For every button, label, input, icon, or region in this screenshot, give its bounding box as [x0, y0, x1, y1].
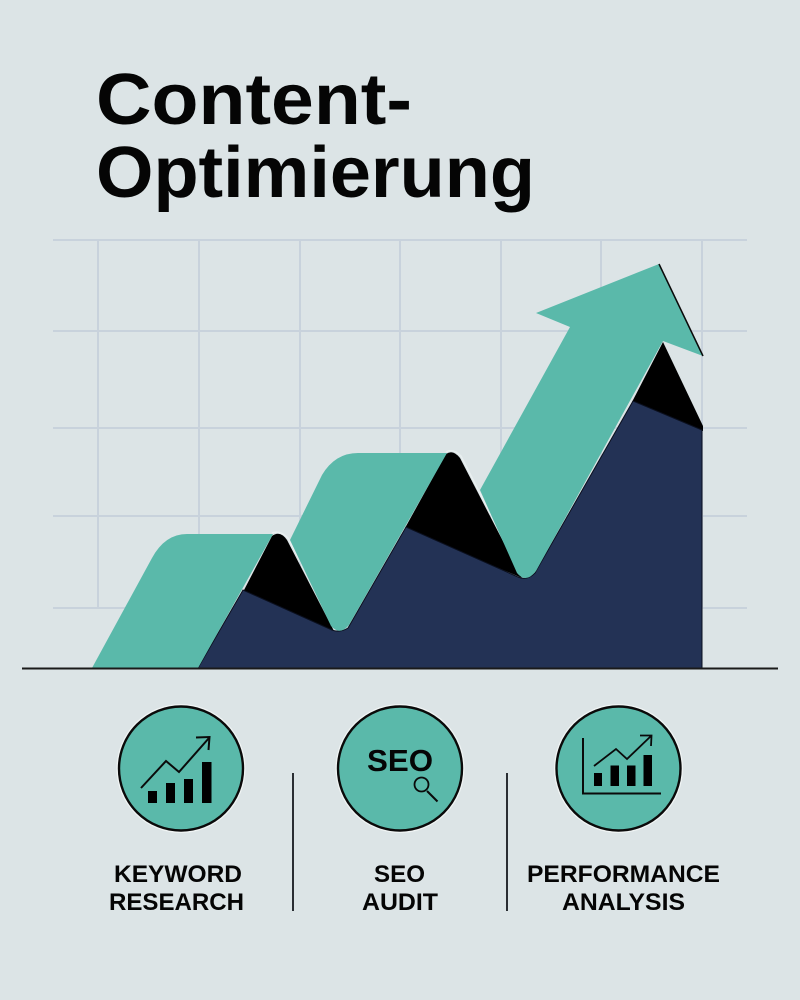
- icon: keyword research: [118, 705, 244, 832]
- title: [96, 60, 535, 213]
- light halo around peaks: [272, 451, 520, 622]
- label: performance analysis: ANALYSIS: [562, 889, 685, 916]
- title: Content-: [96, 60, 412, 140]
- label: keyword research: RESEARCH: [109, 889, 244, 916]
- arrow head edge: [659, 264, 703, 356]
- icon: seo audit: SEO: [367, 743, 433, 778]
- navy area: [198, 401, 702, 668]
- label: keyword research: KEYWORD: [114, 861, 242, 888]
- title: Optimierung: [96, 133, 535, 213]
- divider left: [292, 773, 294, 911]
- label: seo audit: AUDIT: [362, 889, 438, 916]
- teal arrow ribbon: [92, 264, 703, 668]
- black shadow folds: [243, 342, 703, 631]
- growth chart: [92, 264, 703, 668]
- label: performance analysis: [527, 861, 720, 916]
- background grid: [53, 240, 747, 608]
- label: seo audit: SEO: [374, 861, 425, 888]
- icon: performance analysis: [555, 705, 682, 832]
- baseline: [22, 668, 778, 670]
- label: seo audit: [362, 861, 438, 916]
- icon: seo audit: [336, 705, 464, 832]
- label: performance analysis: PERFORMANCE: [527, 861, 720, 888]
- label: keyword research: [109, 861, 244, 916]
- divider right: [506, 773, 508, 911]
